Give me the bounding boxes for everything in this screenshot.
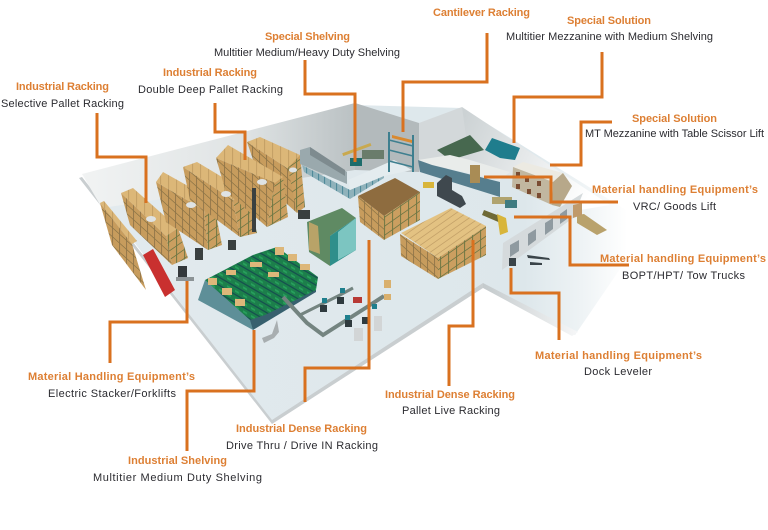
multitier medium shelving on mezzanine xyxy=(300,143,412,199)
dock wall xyxy=(502,193,583,270)
double deep rack 3 xyxy=(247,137,305,213)
double deep rack 2 xyxy=(216,145,288,227)
label: VRC goods lift xyxy=(592,184,758,213)
connector: cantilever racking xyxy=(403,33,487,132)
label: double deep pallet racking: Industrial Racking xyxy=(163,67,257,79)
connector: MT mezzanine xyxy=(550,122,612,165)
label: double deep pallet racking: Double Deep Pallet Racking xyxy=(138,84,283,96)
connector: VRC goods lift xyxy=(484,177,618,202)
small yellow forklift xyxy=(423,182,434,188)
rack markers xyxy=(146,168,297,222)
back walls xyxy=(82,103,610,210)
label: selective pallet racking xyxy=(1,81,124,110)
connector: selective pallet racking xyxy=(97,113,146,203)
connector: special shelving xyxy=(305,60,355,162)
label: special shelving: Special Shelving xyxy=(265,31,350,43)
pallet live rack xyxy=(400,208,486,279)
dock pallet trucks xyxy=(509,255,550,266)
dark shelving unit xyxy=(437,175,466,208)
far left rack xyxy=(100,201,146,290)
label: drive-in racking xyxy=(226,423,378,452)
connector: medium duty shelving xyxy=(187,330,254,451)
label: pallet live racking: Industrial Dense Racking xyxy=(385,389,515,401)
MT mezzanine xyxy=(512,162,572,207)
label: dock leveler: Material handling Equipment’s xyxy=(535,350,702,362)
connector: BOPT HPT tow trucks xyxy=(514,217,629,265)
label: multitier mezzanine: Special Solution xyxy=(567,15,651,27)
selective pallet rack 2 xyxy=(156,172,222,250)
floor front edges xyxy=(79,177,578,424)
label: drive-in racking: Industrial Dense Racking xyxy=(236,423,367,435)
label: MT mezzanine: MT Mezzanine with Table Scissor Lift xyxy=(585,128,764,140)
connector: double deep pallet racking xyxy=(215,103,245,160)
warehouse scene xyxy=(79,103,650,424)
label: multitier medium duty shelving xyxy=(93,455,262,484)
label: BOPT HPT tow trucks: BOPT/HPT/ Tow Trucks xyxy=(622,270,746,282)
label: BOPT HPT tow trucks xyxy=(600,253,766,282)
connector: dock leveler xyxy=(511,268,559,340)
pallet truck on floor xyxy=(262,320,279,343)
label: pallet live racking: Pallet Live Racking xyxy=(402,405,500,417)
label: electric stacker: Electric Stacker/Forklifts xyxy=(48,388,176,400)
connector: electric stacker xyxy=(110,281,187,363)
label: multitier medium duty shelving: Multitier Medium Duty Shelving xyxy=(93,472,262,484)
label: selective pallet racking: Selective Pallet Racking xyxy=(1,98,124,110)
red carts xyxy=(143,249,175,297)
label: double deep pallet racking xyxy=(138,67,283,96)
loose pallet boxes xyxy=(384,280,391,300)
label: selective pallet racking: Industrial Racking xyxy=(16,81,109,93)
label: dock leveler xyxy=(535,350,702,378)
label: VRC goods lift: Material handling Equipment’s xyxy=(592,184,758,196)
label: dock leveler: Dock Leveler xyxy=(584,366,652,378)
double deep rack 1 xyxy=(183,162,257,237)
selective pallet rack 1 xyxy=(121,188,188,265)
label: MT mezzanine: Special Solution xyxy=(632,113,717,125)
upper mezzanine with medium shelving xyxy=(418,135,520,197)
label: BOPT HPT tow trucks: Material handling Equipment’s xyxy=(600,253,766,265)
floor xyxy=(84,105,650,422)
label: drive-in racking: Drive Thru / Drive IN Racking xyxy=(226,440,378,452)
label: electric stacker xyxy=(28,371,195,400)
forklifts between racks xyxy=(195,188,310,260)
label: VRC goods lift: VRC/ Goods Lift xyxy=(633,201,716,213)
VRC goods xyxy=(492,197,517,208)
label: cantilever racking: Cantilever Racking xyxy=(433,7,530,19)
label: multitier medium duty shelving: Industrial Shelving xyxy=(128,455,227,467)
label: special shelving: Multitier Medium/Heavy Duty Shelving xyxy=(214,47,400,59)
label: MT mezzanine xyxy=(585,113,764,140)
medium duty shelving module xyxy=(198,247,318,330)
yellow tow truck xyxy=(482,210,508,235)
outdoor ramp xyxy=(573,203,607,235)
connector: drive-in racking xyxy=(305,240,369,402)
connector: multitier mezzanine xyxy=(514,52,602,143)
label: multitier mezzanine: Multitier Mezzanine with Medium Shelving xyxy=(506,31,713,43)
label: special shelving xyxy=(214,31,400,59)
drive-in rack xyxy=(358,178,420,240)
electric stacker xyxy=(176,266,194,281)
connector: pallet live racking xyxy=(449,240,473,386)
green pallet rack xyxy=(307,208,356,266)
label: multitier mezzanine xyxy=(506,15,713,43)
label: pallet live racking xyxy=(385,389,515,417)
label: electric stacker: Material Handling Equipment’s xyxy=(28,371,195,383)
cantilever rack xyxy=(389,132,413,172)
conveyor line and stations xyxy=(283,288,384,341)
